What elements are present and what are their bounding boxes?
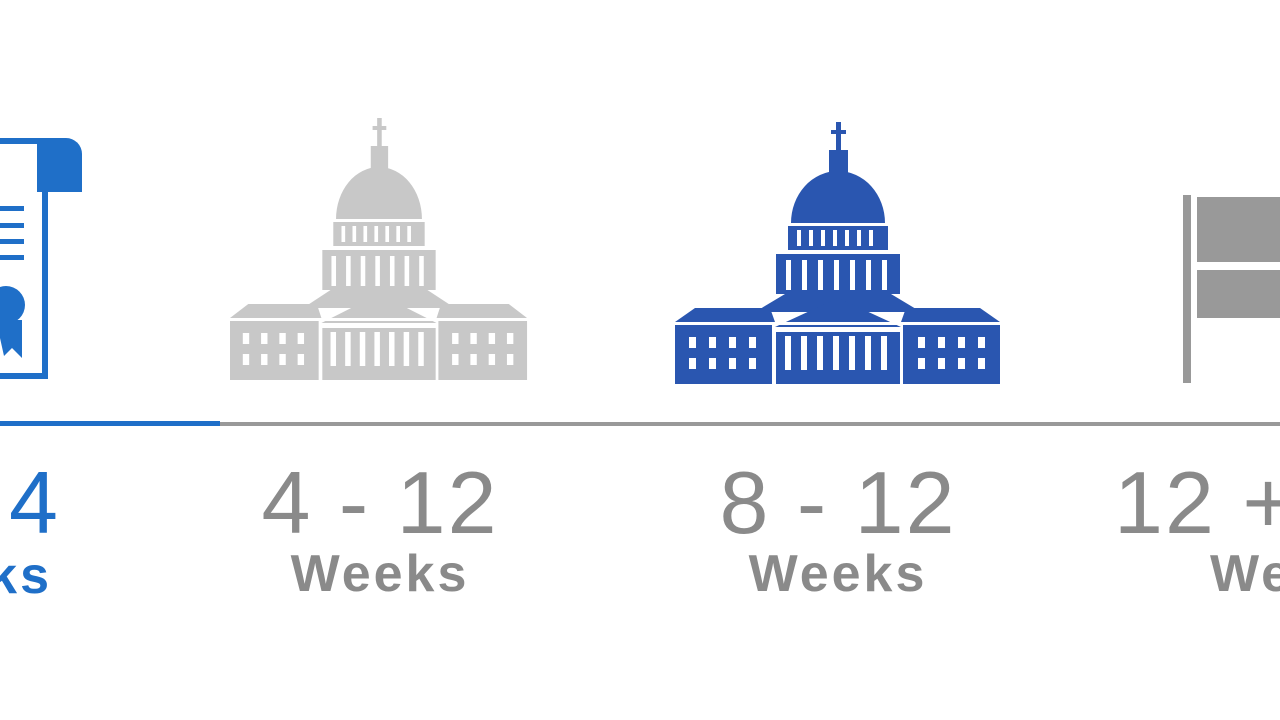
- icon: capitol gray: [230, 118, 527, 380]
- label: 8-12 weeks: Weeks: [749, 545, 927, 603]
- label: 4-12 weeks: 4 - 12: [261, 453, 499, 552]
- label: 4-12 weeks: [261, 453, 499, 603]
- label: 12+ weeks (partial): [1114, 453, 1280, 603]
- label: 8-12 weeks: [719, 453, 957, 603]
- icon: certificate: [0, 138, 82, 376]
- label: 4 weeks (partial): 4: [9, 453, 60, 552]
- label: 4-12 weeks: Weeks: [291, 545, 469, 603]
- timeline: [0, 421, 1280, 426]
- icon: capitol blue: [675, 122, 1000, 384]
- label: 4 weeks (partial): [0, 453, 60, 605]
- icon: flag: [1183, 195, 1280, 383]
- label: 8-12 weeks: 8 - 12: [719, 453, 957, 552]
